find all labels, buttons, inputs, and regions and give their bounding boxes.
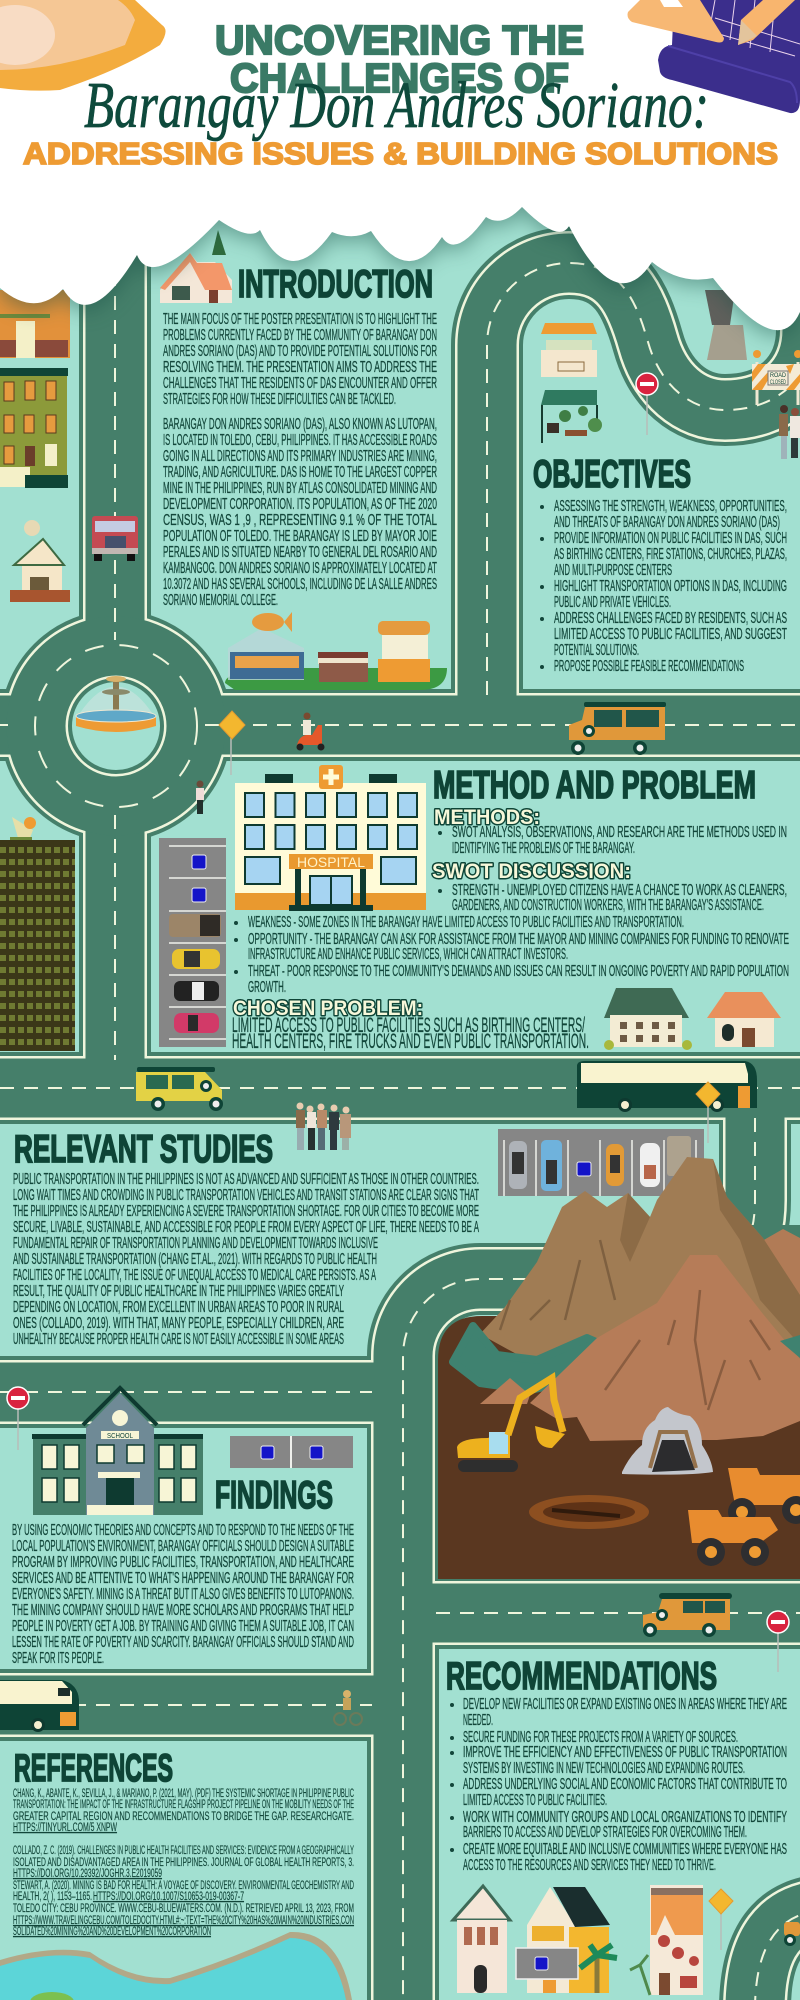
icon: vehicle lower right — [784, 1922, 800, 1946]
icon: bus lower left — [0, 1680, 79, 1732]
heading: references: REFERENCES — [14, 1747, 173, 1790]
icon: hospital — [235, 765, 426, 911]
icon: dump trucks — [688, 1468, 800, 1566]
text block: relevant studies: ONES (COLLADO, 2019). WITH THAT, MANY PEOPLE, ESPECIALLY CHILDREN, ARE — [13, 1315, 344, 1332]
text block: recommendations: LIMITED ACCESS TO PUBLIC FACILITIES. — [463, 1792, 607, 1809]
cloud header — [0, 0, 800, 330]
text block: relevant studies: DEPENDING ON LOCATION, FROM EXCELLENT IN URBAN AREAS TO POOR IN RURAL — [13, 1299, 344, 1316]
text: THE MAIN FOCUS OF THE POSTER PRESENTATION IS TO HIGHLIGHT THE — [163, 311, 437, 328]
icon: school: SCHOOL — [107, 1431, 133, 1440]
icon: statue — [705, 290, 747, 360]
icon: warning sign lower right — [709, 1889, 733, 1950]
text block: objectives: POTENTIAL SOLUTIONS. — [554, 642, 639, 659]
title: CHALLENGES OF — [230, 55, 569, 101]
text block: findings: PEOPLE IN POVERTY GET A JOB. BY TRAINING AND GIVING THEM A SUITABLE JOB, IT CAN — [12, 1618, 354, 1635]
icon: excavator — [457, 1378, 565, 1472]
heading: introduction: INTRODUCTION — [238, 263, 433, 306]
text block: introduction: STRATEGIES FOR HOW THESE DIFFICULTIES CAN BE TACKLED. — [163, 391, 396, 408]
text: TRANSPORTATION: THE IMPACT OF THE INFRASTRUCTURE FLAGSHIP PROJECT PIPELINE ON THE MOBILITY NEEDS OF THE — [13, 1799, 354, 1811]
icon: yellow jeepney — [136, 1067, 223, 1111]
icon: top parking lot — [498, 1129, 704, 1196]
text block: relevant studies: FUNDAMENTAL REPAIR OF TRANSPORTATION PLANNING AND DEVELOPMENT TOWARDS INCLUSIVE — [13, 1235, 378, 1252]
text block: references: HTTPS://TINYURL.COM/5 XNPW — [13, 1822, 117, 1834]
text block: findings: THE MINING COMPANY SHOULD HAVE MORE SCHOLARS AND PROGRAMS THAT HELP — [12, 1602, 354, 1619]
text: EVERYONE'S SAFETY. MINING IS A THREAT BUT IT ALSO GIVES BENEFITS TO LUTOPANONS. — [12, 1586, 354, 1603]
text block: relevant studies: FACILITIES OF THE LOCALITY, THE ISSUE OF UNEQUAL ACCESS TO MEDICAL CARE PERSISTS. AS A — [13, 1267, 376, 1284]
text block: objectives: PUBLIC AND PRIVATE VEHICLES. — [554, 594, 671, 611]
text block: method and problem: GROWTH. — [248, 979, 286, 996]
icon: green apartment — [0, 368, 68, 488]
icon: intro house — [160, 230, 232, 303]
text block: introduction: TRADING, AND AGRICULTURE. DAS IS HOME TO THE LARGEST COPPER — [163, 464, 437, 481]
icon: blueprint tablet, ruler and pencil — [628, 0, 800, 113]
text block: introduction: KAMBANGOG. DON ANDRES SORIANO IS APPROXIMATELY LOCATED AT — [163, 560, 437, 577]
text block: references: HTTPS://DOI.ORG/10.1007/S10653-019-00367-7 — [93, 1891, 244, 1903]
text block: method and problem — [232, 806, 789, 1053]
text block: recommendations — [450, 1696, 787, 1874]
text: BY USING ECONOMIC THEORIES AND CONCEPTS AND TO RESPOND TO THE NEEDS OF THE — [12, 1522, 354, 1539]
text block: references: HTTPS://DOI.ORG/10.29392/JOGHR.3.E2019059 — [13, 1868, 162, 1880]
icon: parking lot with cars — [159, 838, 226, 1047]
text block: references: STEWART, A. (2020). MINING IS BAD FOR HEALTH: A VOYAGE OF DISCOVERY. ENVIRONMENTAL GEOCHEMISTRY AND — [13, 1880, 354, 1892]
icon: road closed barrier: CLOSED — [770, 380, 786, 386]
icon: pedestrian — [196, 780, 204, 814]
text block: findings: PROGRAM BY IMPROVING PUBLIC FACILITIES, TRANSPORTATION, AND HEALTHCARE — [12, 1554, 354, 1571]
text block: relevant studies: RESULT, THE QUALITY OF PUBLIC HEALTHCARE IN THE PHILIPPINES VARIES GREATLY — [13, 1283, 344, 1300]
text block: introduction: POPULATION OF TOLEDO. THE BARANGAY IS LED BY MAYOR JOIE — [163, 528, 437, 545]
text block: findings: SPEAK FOR ITS PEOPLE. — [12, 1650, 104, 1667]
icon: stop sign findings — [7, 1387, 29, 1450]
icon: orange jeepney — [569, 702, 666, 755]
text block: objectives: AND MULTI-PURPOSE CENTERS — [554, 562, 672, 579]
text block: introduction: ANDRES SORIANO (DAS) AND TO PROVIDE POTENTIAL SOLUTIONS FOR — [163, 343, 437, 360]
icon: scooter — [296, 712, 324, 750]
heading: findings: FINDINGS — [215, 1474, 333, 1517]
icon: crop field — [0, 840, 75, 1051]
icon: mountains — [453, 1157, 800, 1441]
text block: method and problem: SWOT DISCUSSION: — [432, 860, 631, 883]
text block: introduction: GOING IN ALL DIRECTIONS AND ITS PRIMARY INDUSTRIES ARE MINING, — [163, 448, 437, 465]
mine ground — [438, 1225, 800, 1579]
text block: relevant studies: AND SUSTAINABLE TRANSPORTATION (CHANG ET.AL., 2021). WITH REGARDS TO PUBLIC HEALTH — [13, 1251, 377, 1268]
icon: farmer — [10, 817, 36, 840]
text block: references — [13, 1788, 354, 1938]
icon: bus — [577, 1061, 757, 1112]
icon: warning sign on bus — [696, 1082, 720, 1143]
icon: findings parking — [230, 1436, 353, 1468]
icon: school — [32, 1388, 203, 1515]
icon: poultry stall — [541, 323, 597, 377]
text block: introduction: DEVELOPMENT CORPORATION. ITS POPULATION, AS OF THE 2020 — [163, 496, 437, 513]
text: COLLADO, Z. C. (2019). CHALLENGES IN PUBLIC HEALTH FACILITIES AND SERVICES: EVIDENCE FROM A GEOGRAPHICALLY — [13, 1845, 354, 1857]
text block: recommendations: NEEDED. — [463, 1712, 493, 1729]
heading: relevant studies: RELEVANT STUDIES — [14, 1128, 273, 1171]
icon: mining pit — [529, 1495, 649, 1529]
text block: objectives — [540, 498, 787, 675]
text block: references: ISOLATED AND DISADVANTAGED AREA IN THE PHILIPPINES. JOURNAL OF GLOBAL HEALTH REPORTS, 3. — [13, 1857, 354, 1869]
text block: introduction: SORIANO MEMORIAL COLLEGE. — [163, 592, 278, 609]
text block: introduction: BARANGAY DON ANDRES SORIANO (DAS), ALSO KNOWN AS LUTOPAN, — [163, 416, 437, 433]
icon: warning sign — [219, 711, 245, 775]
icon: fire truck — [92, 516, 138, 561]
text block: references: HEALTH, 2( ), 1153–1165. — [13, 1891, 92, 1903]
icon: road closed barrier — [752, 350, 800, 405]
text block: references: CHANG, K., ABANTE, K., SEVILLA, J., & MARIANO, P. (2021, MAY). (PDF) THE SYSTEMIC SHORTAGE IN PHILIPPINE PUBLIC — [13, 1788, 354, 1800]
icon: mine entrance — [622, 1407, 713, 1475]
text block: introduction: CHALLENGES THAT THE RESIDENTS OF DAS ENCOUNTER AND OFFER — [163, 375, 437, 392]
text block: introduction — [163, 311, 437, 609]
icon: two houses — [604, 988, 781, 1050]
text: IS LOCATED IN TOLEDO, CEBU, PHILIPPINES. IT HAS ACCESSIBLE ROADS — [163, 432, 437, 449]
icon: orange house — [0, 290, 70, 358]
icon: stop sign lower right — [767, 1611, 789, 1672]
icon: small cottage — [10, 520, 70, 602]
text: PROBLEMS CURRENTLY FACED BY THE COMMUNITY OF BARANGAY DON — [163, 327, 437, 344]
text block: relevant studies — [13, 1171, 479, 1348]
icon: cyclist — [334, 1690, 362, 1725]
text block: introduction: MINE IN THE PHILIPPINES, RUN BY ATLAS CONSOLIDATED MINING AND — [163, 480, 437, 497]
icon: row of houses — [453, 1885, 703, 1995]
icon: hard hat — [0, 0, 166, 91]
text block: introduction: PERALES AND IS SITUATED NEARBY TO GENERAL DEL ROSARIO AND — [163, 544, 437, 561]
icon: group of people — [296, 1102, 351, 1150]
title: UNCOVERING THE — [215, 17, 584, 63]
icon: hospital: HOSPITAL — [297, 854, 365, 870]
text block: method and problem: METHODS: — [434, 806, 540, 829]
title — [23, 17, 778, 171]
text block: findings: SERVICES AND BE ATTENTIVE TO WHAT'S HAPPENING AROUND THE BARANGAY FOR — [12, 1570, 354, 1587]
icon: road closed barrier: ROAD — [770, 373, 787, 379]
icon: bottom jeepney — [643, 1593, 732, 1637]
icon: market stalls — [225, 612, 447, 690]
text block: introduction: RESOLVING THEM. THE PRESENTATION AIMS TO ADDRESS THE — [163, 359, 437, 376]
text block: references: GREATER CAPITAL REGION AND RECOMMENDATIONS TO BRIDGE THE GAP. RESEARCHGATE. — [13, 1811, 354, 1823]
text block: references: SOLIDATED%20MINING%20AND%20DEVELOPMENT%20CORPORATION — [13, 1926, 211, 1938]
icon: people at barrier — [779, 405, 800, 459]
text block: references: TOLEDO CITY: CEBU PROVINCE. WWW.CEBU-BLUEWATERS.COM. (N.D.). RETRIEVED APRIL 13, 2023, FROM — [13, 1903, 354, 1915]
icon: plant shop — [541, 390, 602, 443]
text block: findings — [12, 1522, 354, 1667]
text block: references: HTTPS://WWW.TRAVELINGCEBU.COM/TOLEDOCITY.HTML#:~:TEXT=THE%20CITY%20HAS%20MAIN%20INDUSTRIES,CON — [13, 1915, 354, 1927]
icon: stop sign — [636, 373, 658, 435]
pool — [0, 1932, 352, 2000]
text block: introduction: 10.3072 AND HAS SEVERAL SCHOOLS, INCLUDING DE LA SALLE ANDRES — [163, 576, 437, 593]
text block: relevant studies: UNHEALTHY BECAUSE PROPER HEALTH CARE IS NOT EASILY ACCESSIBLE IN SOME AREAS — [13, 1331, 344, 1348]
text block: introduction: CENSUS, WAS 1 ,9 , REPRESENTING 9.1 % OF THE TOTAL — [163, 512, 437, 529]
text: LOCAL POPULATION'S ENVIRONMENT, BARANGAY OFFICIALS SHOULD DESIGN A SUITABLE — [12, 1538, 354, 1555]
text: LESSEN THE RATE OF POVERTY AND SCARCITY. BARANGAY OFFICIALS SHOULD STAND AND — [12, 1634, 354, 1651]
text block: method and problem: CHOSEN PROBLEM: — [233, 997, 423, 1020]
icon: fountain — [76, 676, 156, 732]
title: ADDRESSING ISSUES & BUILDING SOLUTIONS — [23, 136, 778, 171]
heading: objectives: OBJECTIVES — [533, 453, 691, 496]
